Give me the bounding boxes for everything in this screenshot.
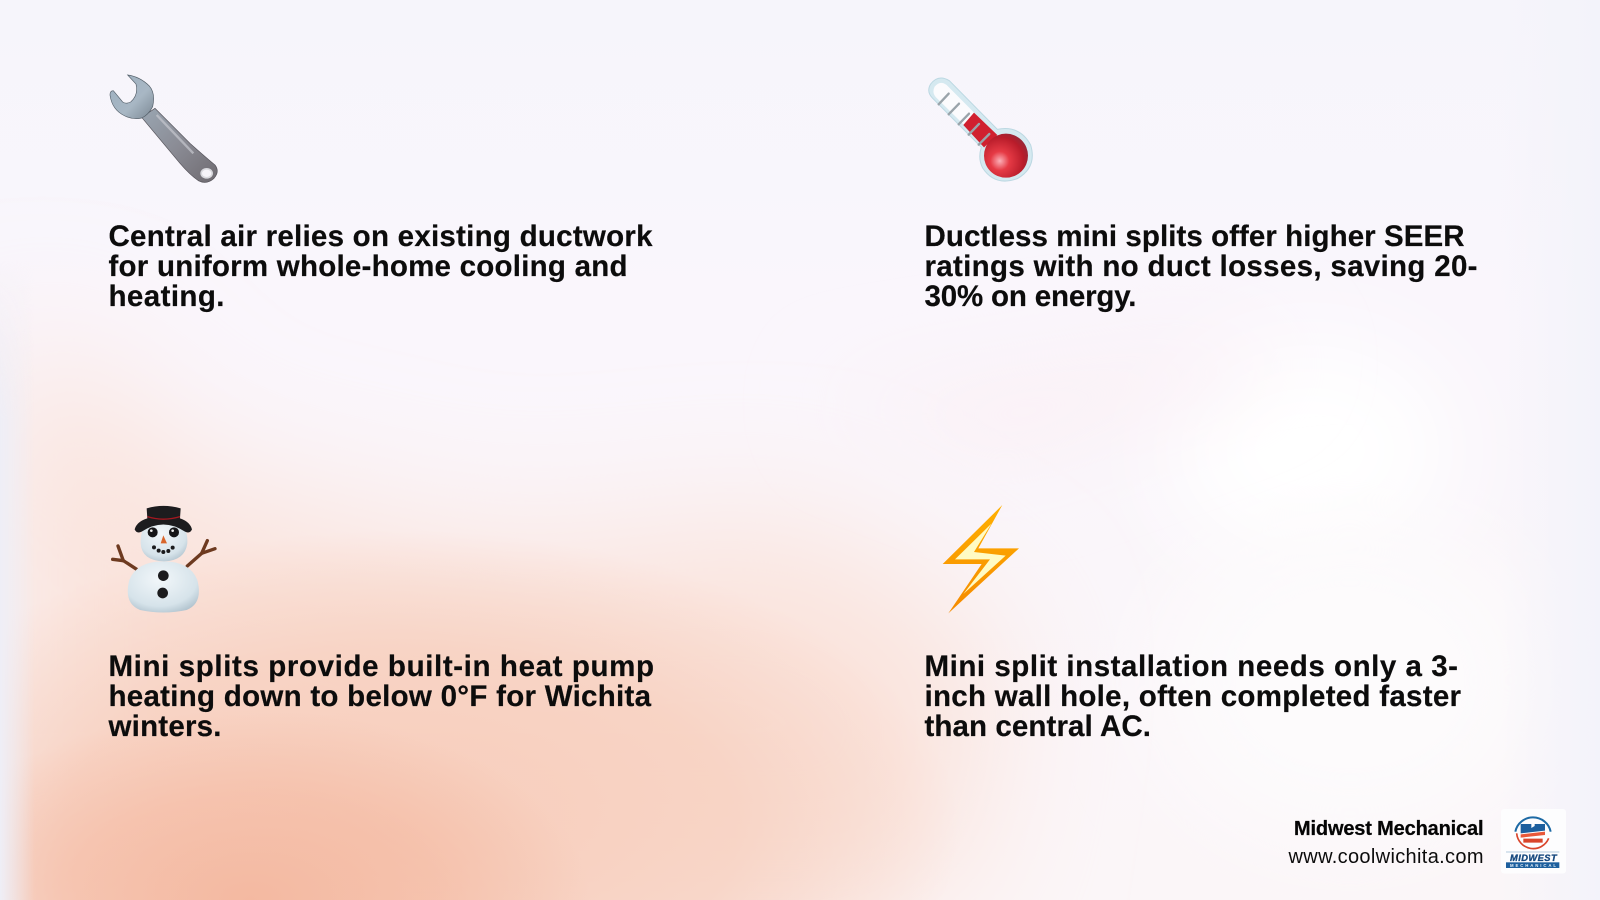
text: heat pump heating: heating down to below 0°F for Wichita bbox=[108, 680, 652, 713]
text: central air: Central air relies on existing ductwork bbox=[108, 220, 653, 253]
logo: MIDWEST bbox=[1510, 853, 1558, 863]
text: ductless efficiency bbox=[924, 220, 1478, 313]
background: soft peach and lavender gradient bbox=[0, 343, 1394, 900]
text: installation: than central AC. bbox=[924, 710, 1151, 743]
logo: MECHANICAL bbox=[1510, 863, 1556, 868]
icon: snowman bbox=[113, 506, 215, 612]
website: www.coolwichita.com bbox=[1288, 846, 1484, 868]
footer: brand bbox=[1288, 809, 1566, 874]
text: central air: heating. bbox=[108, 280, 224, 313]
panel: installation bbox=[924, 505, 1462, 743]
logo bbox=[1501, 809, 1566, 874]
text: installation: Mini split installation needs only a 3- bbox=[924, 650, 1458, 683]
text: central air bbox=[108, 220, 653, 313]
text: installation: inch wall hole, often completed faster bbox=[924, 680, 1462, 713]
text: ductless efficiency: Ductless mini splits offer higher SEER bbox=[924, 220, 1464, 253]
panel: ductless efficiency bbox=[924, 78, 1478, 313]
panel: heat pump heating bbox=[108, 506, 654, 743]
text: heat pump heating: Mini splits provide built-in heat pump bbox=[108, 650, 654, 683]
icon: wrench bbox=[110, 75, 217, 182]
text: heat pump heating bbox=[108, 650, 654, 743]
text: central air: for uniform whole-home cooling and bbox=[108, 250, 628, 283]
text: installation bbox=[924, 650, 1462, 743]
text: ductless efficiency: ratings with no duct losses, saving 20- bbox=[924, 250, 1478, 283]
icon: lightning bolt bbox=[943, 505, 1019, 613]
icon: thermometer bbox=[929, 78, 1032, 181]
text: ductless efficiency: 30% on energy. bbox=[924, 280, 1136, 313]
panel: central air bbox=[108, 75, 653, 313]
text: heat pump heating: winters. bbox=[108, 710, 222, 743]
brand name: Midwest Mechanical bbox=[1294, 818, 1484, 840]
